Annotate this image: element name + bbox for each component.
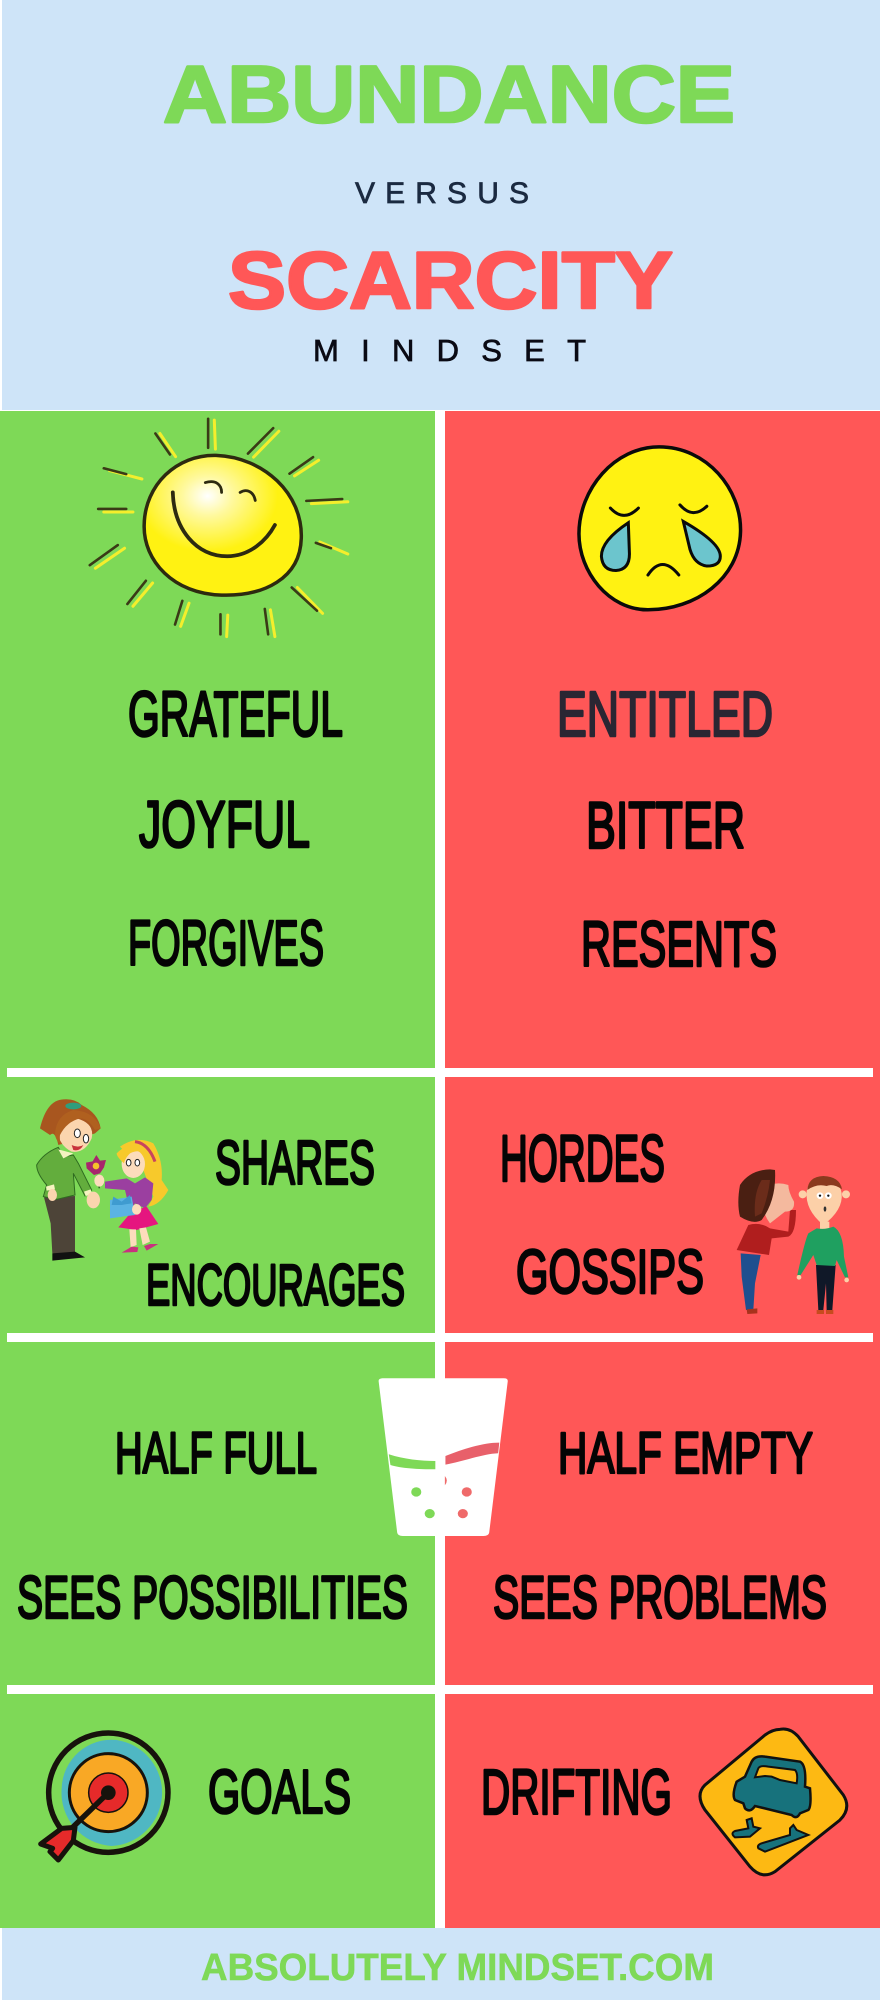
text: grateful: GRATEFUL [128, 678, 343, 750]
row divider 3 [7, 1685, 873, 1694]
icon: crying face [579, 447, 741, 610]
text: half full: HALF FULL [115, 1421, 317, 1486]
row divider 2 [7, 1333, 873, 1342]
panel: footer [2, 1928, 880, 2000]
icon: two people whispering [737, 1169, 850, 1314]
heading: scarcity: SCARCITY [228, 236, 673, 326]
heading: abundance: ABUNDANCE [163, 50, 735, 140]
text: bitter: BITTER [586, 788, 745, 862]
icon: target with arrow [41, 1733, 168, 1860]
icon: smiling sun [90, 419, 348, 637]
text: shares: SHARES [215, 1129, 375, 1198]
row divider 1 [7, 1068, 873, 1077]
text: goals: GOALS [208, 1758, 351, 1827]
text: hordes: HORDES [500, 1121, 665, 1195]
text: forgives: FORGIVES [128, 907, 324, 979]
text: resents: RESENTS [581, 908, 777, 980]
panel: scarcity column [445, 411, 880, 1928]
text: mindset: MINDSET [313, 333, 586, 368]
icon: half full glass [379, 1378, 508, 1536]
footer text: ABSOLUTELY MINDSET.COM [201, 1947, 714, 1989]
divider between columns [435, 411, 445, 1928]
text: gossips: GOSSIPS [516, 1238, 704, 1307]
text: joyful: JOYFUL [139, 787, 310, 861]
icon: woman and girl sharing [37, 1099, 168, 1261]
panel: header [2, 0, 880, 410]
text: encourages: ENCOURAGES [146, 1253, 405, 1318]
text: drifting: DRIFTING [481, 1756, 672, 1828]
icon: slippery road sign [700, 1729, 847, 1875]
text: versus: VERSUS [355, 177, 529, 210]
panel: abundance column [0, 411, 435, 1928]
text: sees possibilities: SEES POSSIBILITIES [17, 1564, 408, 1631]
text: entitled: ENTITLED [557, 678, 773, 750]
